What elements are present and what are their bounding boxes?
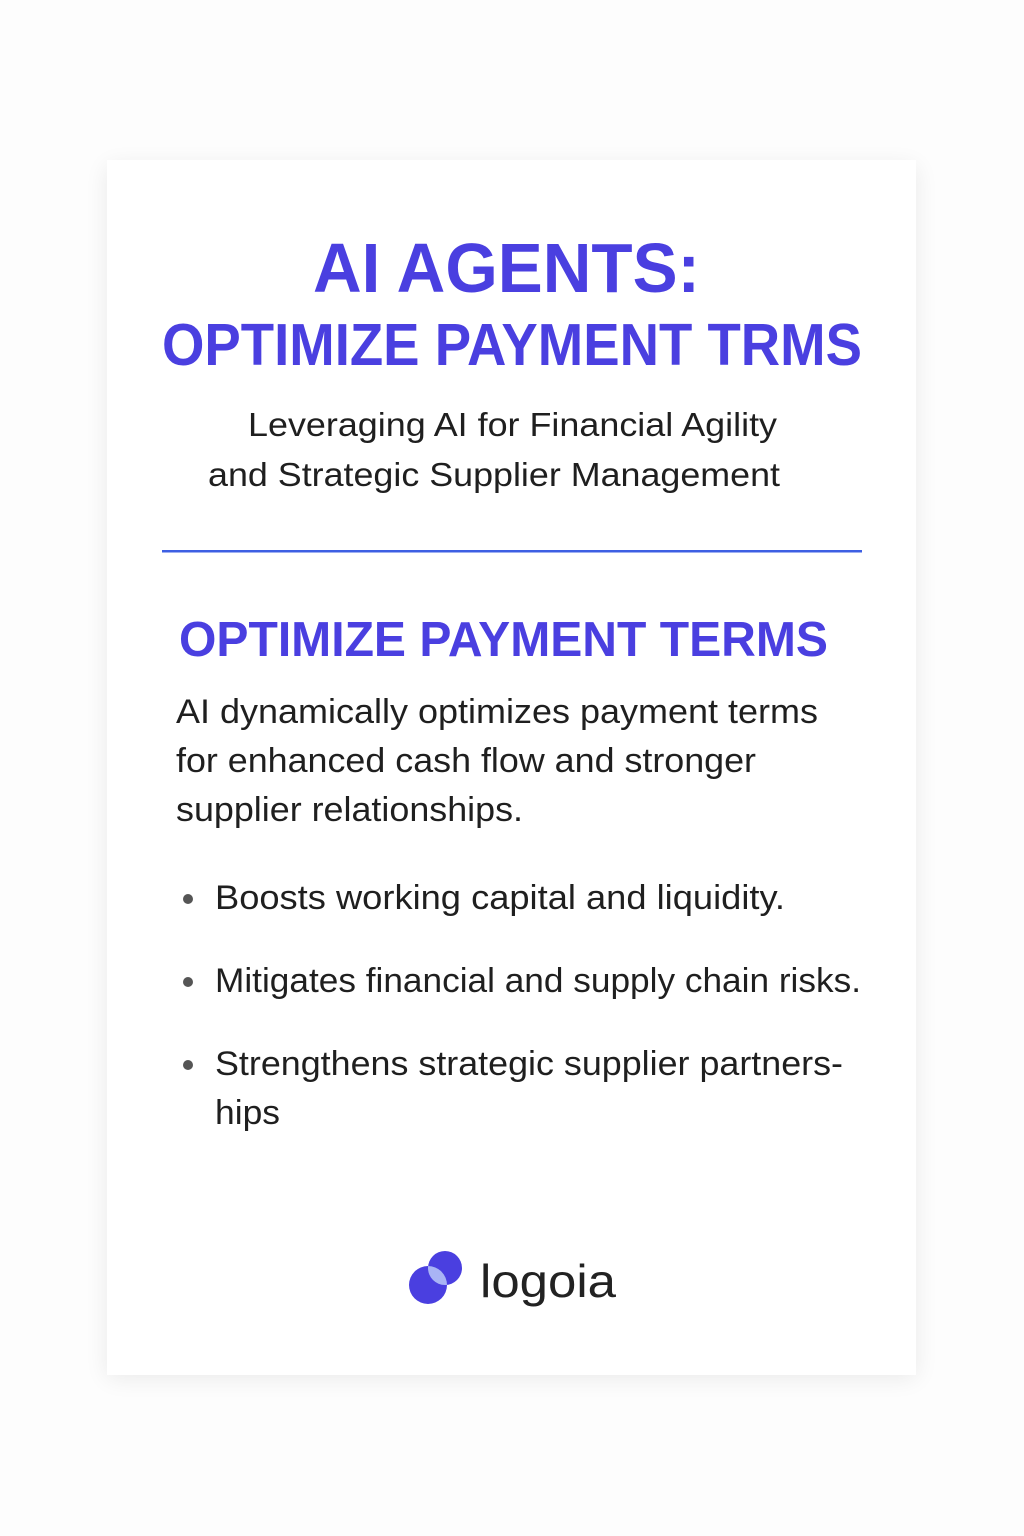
text block: description: AI dynamically optimizes payment terms bbox=[176, 693, 818, 731]
heading: optimize payment terms: OPTIMIZE PAYMENT TERMS bbox=[179, 613, 828, 667]
bullet list: Mitigates financial and supply chain risks. bbox=[215, 962, 861, 1000]
logo: logoia bbox=[480, 1255, 616, 1307]
subtitle: and Strategic Supplier Management bbox=[208, 456, 780, 493]
text block: description bbox=[176, 693, 818, 829]
subtitle bbox=[208, 406, 780, 493]
title bbox=[162, 229, 862, 378]
title: OPTIMIZE PAYMENT TRMS bbox=[162, 312, 862, 378]
subtitle: Leveraging AI for Financial Agility bbox=[248, 406, 778, 443]
logo bbox=[409, 1251, 616, 1307]
bullet list: Boosts working capital and liquidity. bbox=[215, 879, 785, 917]
bullet list: hips bbox=[215, 1094, 280, 1132]
text block: description: supplier relationships. bbox=[176, 791, 523, 829]
text block: description: for enhanced cash flow and stronger bbox=[176, 742, 756, 780]
title: AI AGENTS: bbox=[313, 229, 700, 307]
panel: card bbox=[107, 160, 916, 1378]
bullet list bbox=[183, 879, 861, 1132]
bullet list: Strengthens strategic supplier partners- bbox=[215, 1045, 843, 1083]
